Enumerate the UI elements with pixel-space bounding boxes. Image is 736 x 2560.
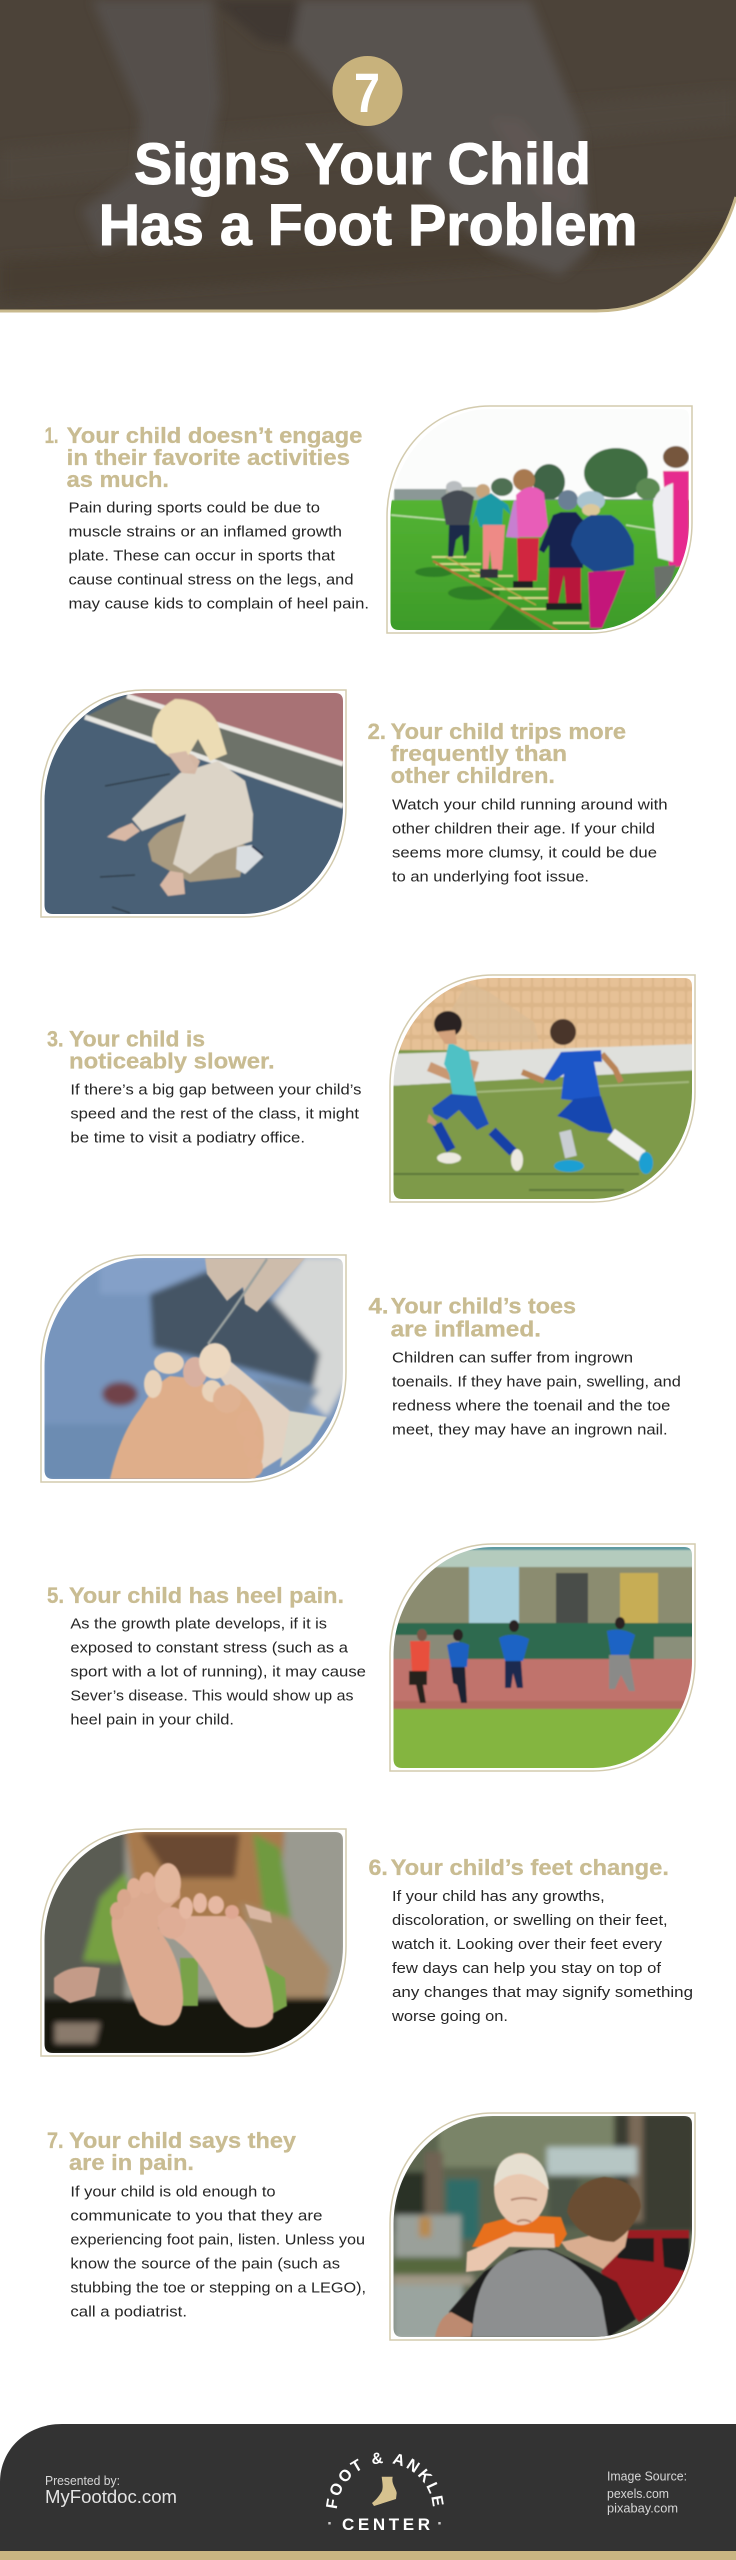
- title: Signs Your Child: [134, 132, 591, 197]
- header panel: [0, 0, 736, 311]
- body text 7: know the source of the pain (such as: [70, 2256, 340, 2273]
- image source credits: Image Source:: [607, 2469, 687, 2484]
- heading 7: Your child says they: [69, 2128, 297, 2153]
- heading 3: [47, 1026, 275, 1074]
- body text 7: experiencing foot pain, listen. Unless you: [70, 2232, 365, 2249]
- heading 5: 5.: [47, 1583, 64, 1608]
- heading 2: 2.: [368, 719, 386, 744]
- body text 7: communicate to you that they are: [70, 2208, 323, 2225]
- panel: sign 5: [47, 1543, 696, 1772]
- body text 1: Pain during sports could be due to: [68, 500, 320, 516]
- heading 2: [368, 719, 626, 788]
- heading 5: Your child has heel pain.: [69, 1583, 344, 1608]
- body text 1: [68, 500, 369, 612]
- body text 4: redness where the toenail and the toe: [392, 1398, 670, 1414]
- photo: children running on track: [389, 1543, 696, 1772]
- body text 1: muscle strains or an inflamed growth: [68, 524, 342, 540]
- header gold edge: [0, 197, 736, 311]
- heading 7: [47, 2128, 297, 2175]
- logo: Foot and Ankle Center: ·: [327, 2514, 333, 2533]
- body text 2: other children their age. If your child: [392, 821, 655, 838]
- logo: Foot and Ankle Center: [326, 2452, 444, 2534]
- body text 7: stubbing the toe or stepping on a LEGO),: [70, 2280, 366, 2297]
- title: [99, 132, 638, 258]
- body text 3: be time to visit a podiatry office.: [70, 1130, 305, 1147]
- title: Has a Foot Problem: [99, 193, 638, 258]
- photo: ingrown toenail treatment: [40, 1254, 347, 1483]
- photo: toddler sitting on court: [40, 689, 347, 918]
- heading 7: 7.: [47, 2128, 64, 2153]
- heading 4: are inflamed.: [391, 1316, 541, 1341]
- body text 2: seems more clumsy, it could be due: [392, 845, 657, 862]
- panel: sign 6: [40, 1828, 693, 2057]
- body text 5: exposed to constant stress (such as a: [70, 1640, 349, 1657]
- heading 3: Your child is: [69, 1026, 205, 1051]
- body text 1: cause continual stress on the legs, and: [68, 572, 354, 588]
- footer panel: [0, 2424, 736, 2560]
- footer background: [0, 2424, 736, 2551]
- heading 2: other children.: [391, 763, 555, 788]
- body text 5: sport with a lot of running), it may cause: [70, 1664, 366, 1681]
- body text 1: plate. These can occur in sports that: [68, 548, 336, 564]
- logo: Foot and Ankle Center: FOOT & ANKLE: [326, 2452, 444, 2508]
- image source credits: [607, 2469, 687, 2516]
- body text 5: heel pain in your child.: [70, 1712, 234, 1729]
- body text 4: meet, they may have an ingrown nail.: [392, 1422, 668, 1438]
- photo: crying toddler held by father: [389, 2112, 696, 2341]
- header background photo: child's feet: [0, 0, 736, 311]
- body text 2: [392, 797, 668, 886]
- body text 3: [70, 1082, 361, 1147]
- photo: soles of child's feet: [40, 1828, 347, 2057]
- body text 6: [391, 1888, 693, 2025]
- footer gold strip: [0, 2551, 736, 2560]
- body text 7: call a podiatrist.: [70, 2304, 187, 2321]
- image source credits: pexels.com: [607, 2486, 669, 2501]
- heading 1: Your child doesn’t engage: [67, 423, 362, 448]
- heading 3: 3.: [47, 1026, 64, 1051]
- heading 2: frequently than: [391, 741, 567, 766]
- body text 6: few days can help you stay on top of: [392, 1960, 662, 1977]
- body text 5: Sever’s disease. This would show up as: [70, 1688, 354, 1705]
- heading 6: 6.: [368, 1855, 388, 1880]
- body text 4: [392, 1350, 681, 1438]
- photo: children on agility ladder: [386, 405, 693, 634]
- body text 7: If your child is old enough to: [70, 2184, 276, 2201]
- panel: sign 4: [40, 1254, 681, 1483]
- heading 6: Your child’s feet change.: [391, 1855, 669, 1880]
- heading 4: 4.: [368, 1294, 388, 1319]
- gold number badge: [332, 56, 402, 126]
- photo: two boys running on field: [389, 974, 696, 1203]
- body text 6: worse going on.: [391, 2008, 508, 2025]
- image source credits: pixabay.com: [607, 2501, 678, 2516]
- heading 1: as much.: [67, 467, 169, 492]
- heading 1: [45, 423, 362, 492]
- presented by: MyFootdoc.com: [45, 2487, 177, 2507]
- heading 1: 1.: [45, 423, 59, 448]
- heading 4: [368, 1294, 576, 1341]
- gold number badge: 7: [354, 61, 380, 124]
- logo: Foot and Ankle Center: CENTER: [342, 2515, 430, 2534]
- heading 2: Your child trips more: [391, 719, 626, 744]
- body text 7: [70, 2184, 366, 2321]
- body text 3: If there’s a big gap between your child’s: [70, 1082, 361, 1099]
- body text 6: any changes that may signify something: [392, 1984, 693, 2001]
- body text 4: Children can suffer from ingrown: [392, 1350, 633, 1366]
- presented by: Presented by:: [45, 2473, 120, 2488]
- icon: foot: [372, 2477, 397, 2506]
- body text 4: toenails. If they have pain, swelling, and: [392, 1374, 681, 1390]
- heading 3: noticeably slower.: [69, 1049, 275, 1074]
- heading 7: are in pain.: [69, 2150, 194, 2175]
- body text 2: Watch your child running around with: [392, 797, 668, 814]
- logo: Foot and Ankle Center: ·: [437, 2514, 443, 2533]
- body text 6: watch it. Looking over their feet every: [391, 1936, 663, 1953]
- panel: sign 3: [47, 974, 696, 1203]
- body text 1: may cause kids to complain of heel pain.: [68, 596, 369, 612]
- heading 4: Your child’s toes: [391, 1294, 576, 1319]
- presented by: [45, 2473, 177, 2507]
- body text 6: If your child has any growths,: [392, 1888, 605, 1905]
- panel: sign 2: [40, 689, 668, 918]
- body text 3: speed and the rest of the class, it might: [70, 1106, 360, 1123]
- body text 5: As the growth plate develops, if it is: [70, 1616, 327, 1633]
- panel: sign 1: [45, 405, 693, 634]
- body text 6: discoloration, or swelling on their feet,: [392, 1912, 668, 1929]
- body text 5: [70, 1616, 366, 1729]
- body text 2: to an underlying foot issue.: [392, 869, 589, 886]
- heading 1: in their favorite activities: [67, 445, 350, 470]
- panel: sign 7: [47, 2112, 696, 2341]
